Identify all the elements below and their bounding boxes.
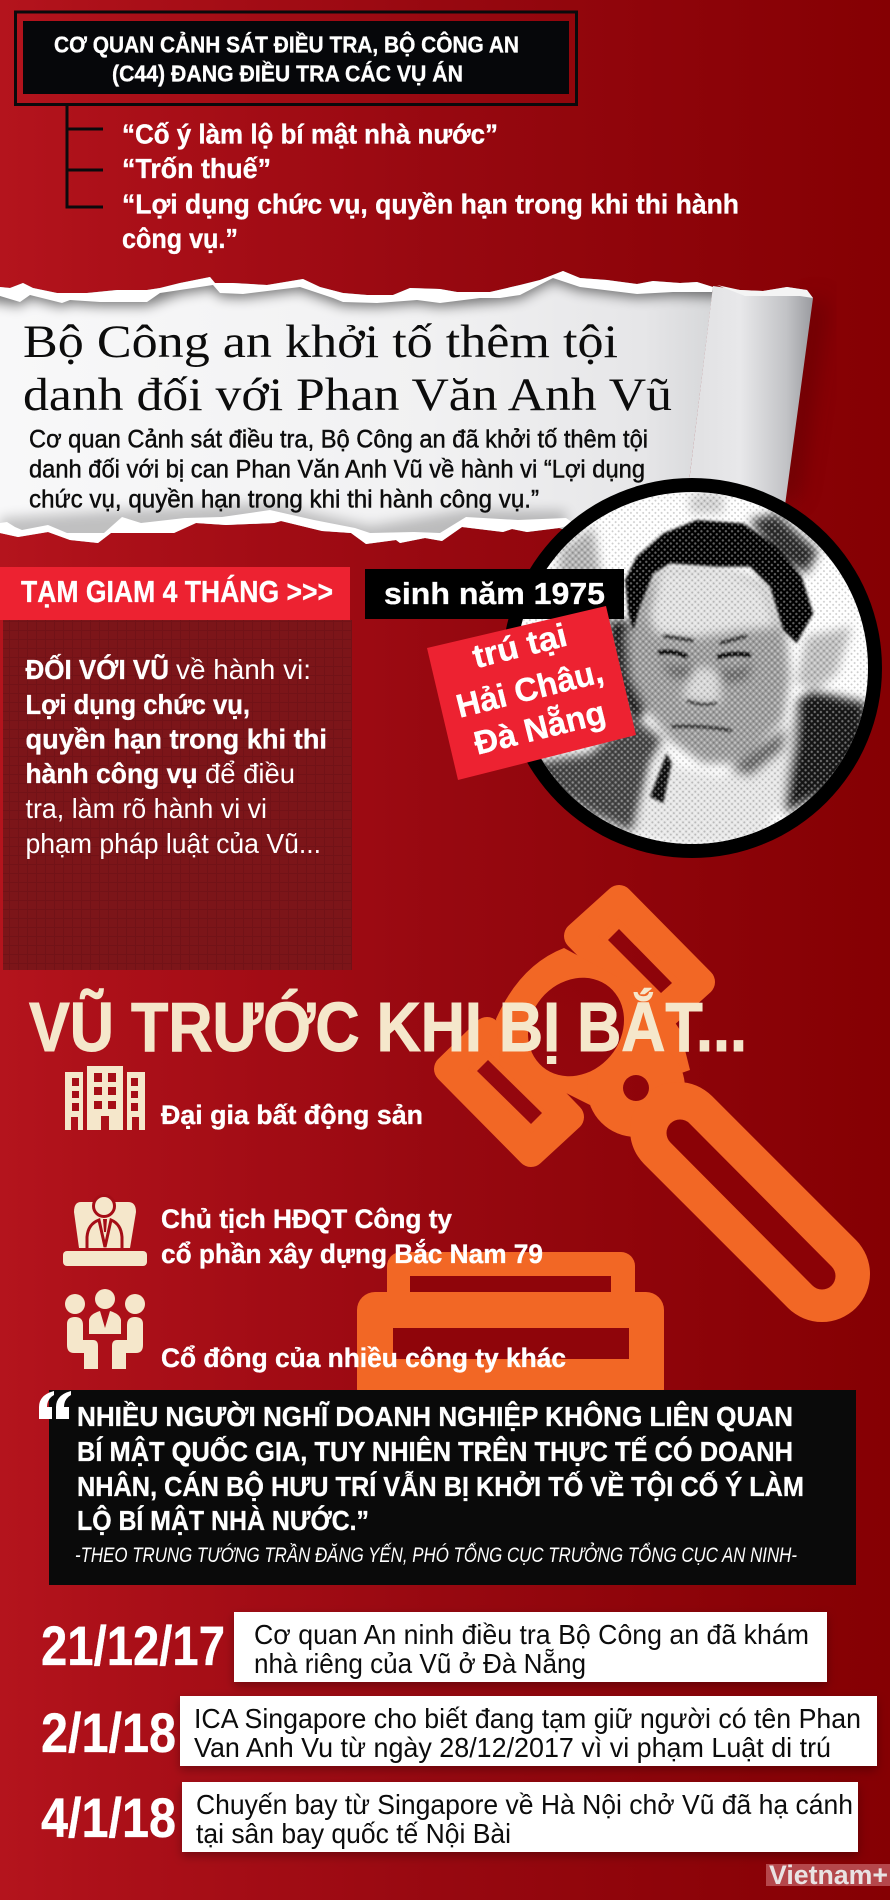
icon: shareholders meeting	[65, 1289, 145, 1369]
logo: Vietnam+: Vietnam+	[769, 1860, 888, 1890]
paper body text: chức vụ, quyền hạn trong khi thi hành công vụ.”	[29, 486, 539, 514]
header box	[16, 12, 576, 104]
paper body text: danh đối với bị can Phan Văn Anh Vũ về hành vi “Lợi dụng	[29, 456, 645, 484]
residence tag: trú tại	[469, 616, 571, 675]
paper body text	[29, 426, 648, 514]
quote panel	[39, 1390, 856, 1585]
residence tag: Hải Châu,	[452, 652, 607, 725]
list of cases: “Trốn thuế”	[122, 153, 271, 184]
paper curl shadow	[775, 300, 826, 500]
list of cases: “Lợi dụng chức vụ, quyền hạn trong khi thi hành	[122, 188, 739, 220]
timeline item 3: 4/1/18	[41, 1786, 176, 1849]
timeline item 3	[41, 1782, 858, 1852]
paper shadow layers	[0, 270, 730, 560]
torn paper panel	[0, 270, 826, 560]
icon: gavel	[357, 899, 822, 1407]
quote panel: NHIỀU NGƯỜI NGHĨ DOANH NGHIỆP KHÔNG LIÊN QUAN	[77, 1400, 793, 1432]
portrait photo in circle	[506, 478, 882, 858]
list of cases: “Cố ý làm lộ bí mật nhà nước”	[122, 118, 498, 150]
detention reason panel: tra, làm rõ hành vi vi	[26, 793, 267, 824]
label: chairman: cổ phần xây dựng Bắc Nam 79	[161, 1238, 543, 1269]
detention reason panel: quyền hạn trong khi thi	[26, 724, 327, 754]
paper headline: Bộ Công an khởi tố thêm tội	[23, 316, 618, 368]
detention reason panel: về hành vi:	[176, 654, 311, 685]
timeline item 2: 2/1/18	[41, 1701, 176, 1764]
icon: quotation mark	[39, 1391, 71, 1419]
detention reason panel: ĐỐI VỚI VŨ	[26, 653, 169, 685]
icon: chairman at desk	[63, 1196, 147, 1266]
bottom torn white edge	[0, 510, 575, 544]
label: chairman	[161, 1204, 543, 1269]
timeline item 2: Van Anh Vu từ ngày 28/12/2017 vì vi phạm Luật di trú	[194, 1732, 831, 1763]
paper headline: danh đối với Phan Văn Anh Vũ	[23, 369, 672, 421]
paper body	[0, 271, 713, 560]
list of cases: công vụ.”	[122, 223, 238, 254]
top torn white edge	[0, 271, 713, 303]
quote panel: BÍ MẬT QUỐC GIA, TUY NHIÊN TRÊN THỰC TẾ CÓ DOANH	[77, 1435, 793, 1467]
timeline item 3: Chuyến bay từ Singapore về Hà Nội chở Vũ đã hạ cánh	[196, 1789, 853, 1820]
label: shareholder: Cổ đông của nhiều công ty khác	[161, 1343, 566, 1373]
quote panel: LỘ BÍ MẬT NHÀ NƯỚC.”	[77, 1504, 369, 1536]
detention reason panel: Lợi dụng chức vụ,	[26, 689, 250, 720]
bracket connector	[67, 105, 103, 207]
timeline item 1: 21/12/17	[41, 1614, 225, 1677]
detention badge: TẠM GIAM 4 THÁNG >>>	[21, 574, 333, 609]
label: real estate: Đại gia bất động sản	[161, 1100, 423, 1130]
header box: CƠ QUAN CẢNH SÁT ĐIỀU TRA, BỘ CÔNG AN	[54, 30, 519, 58]
paper headline	[23, 316, 672, 421]
residence tag	[427, 606, 636, 780]
detention reason panel: hành công vụ	[26, 758, 198, 789]
detention reason panel	[3, 620, 352, 970]
detention reason panel: để điều	[205, 758, 295, 789]
birth year badge: sinh năm 1975	[384, 576, 605, 611]
birth year badge	[365, 569, 624, 619]
list of cases	[122, 118, 739, 254]
timeline item 1	[41, 1612, 827, 1682]
heading: VŨ TRƯỚC KHI BỊ BẮT...	[29, 987, 747, 1066]
paper curl	[680, 286, 813, 520]
header box: (C44) ĐANG ĐIỀU TRA CÁC VỤ ÁN	[112, 60, 463, 86]
icon: buildings	[65, 1066, 145, 1130]
timeline item 3: tại sân bay quốc tế Nội Bài	[196, 1818, 511, 1849]
timeline item 1: nhà riêng của Vũ ở Đà Nẵng	[254, 1648, 586, 1679]
timeline item 1: Cơ quan An ninh điều tra Bộ Công an đã khám	[254, 1619, 809, 1650]
timeline item 2: ICA Singapore cho biết đang tạm giữ người có tên Phan	[194, 1703, 861, 1734]
detention badge	[0, 567, 350, 620]
timeline item 2	[41, 1696, 877, 1766]
residence tag: Đà Nẵng	[470, 692, 609, 762]
label: chairman: Chủ tịch HĐQT Công ty	[161, 1204, 452, 1234]
paper body text: Cơ quan Cảnh sát điều tra, Bộ Công an đã khởi tố thêm tội	[29, 426, 648, 454]
quote panel: NHÂN, CÁN BỘ HƯU TRÍ VẪN BỊ KHỞI TỐ VỀ TỘI CỐ Ý LÀM	[77, 1470, 804, 1502]
detention reason panel: phạm pháp luật của Vũ...	[26, 828, 321, 859]
